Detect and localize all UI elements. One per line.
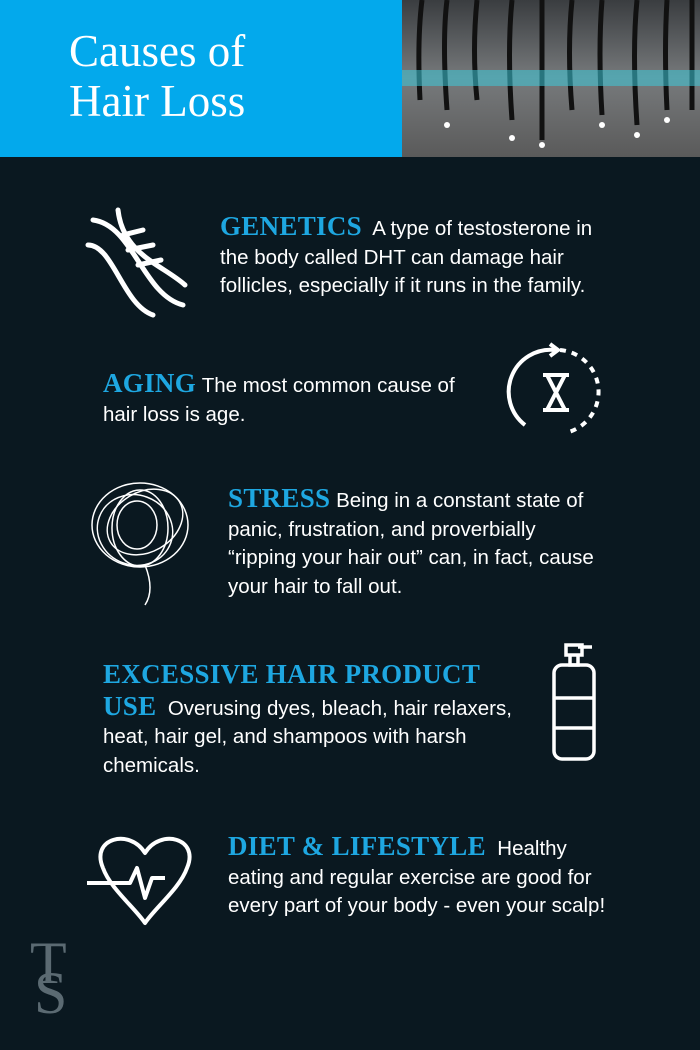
header panel — [0, 0, 402, 157]
text: genetics: GENETICS A type of testosterone in — [220, 211, 592, 241]
icon: hourglass — [506, 342, 601, 434]
text: excessive product use: EXCESSIVE HAIR PRODUCT — [103, 659, 480, 689]
text: diet & lifestyle: DIET & LIFESTYLE Healthy — [228, 831, 567, 861]
title — [69, 26, 246, 126]
icon: tangled scribble — [91, 482, 189, 606]
text: diet & lifestyle: eating and regular exercise are good for — [228, 866, 592, 888]
text: stress: your hair to fall out. — [228, 574, 402, 598]
text: excessive product use — [103, 659, 512, 776]
logo: TS — [30, 930, 67, 1026]
text: aging: hair loss is age. — [103, 402, 245, 426]
logo: TS: T — [30, 930, 67, 996]
icon: DNA — [86, 208, 188, 318]
icon: heart with pulse — [87, 836, 192, 926]
text: stress — [228, 483, 594, 598]
text: genetics: the body called DHT can damage hair — [220, 246, 564, 268]
header image: hair follicles — [402, 0, 700, 157]
text: excessive product use: USE Overusing dyes, bleach, hair relaxers, — [103, 690, 512, 720]
title: Causes of — [69, 26, 245, 76]
text: stress: “ripping your hair out” can, in fact, cause — [228, 546, 594, 569]
text: genetics — [220, 211, 592, 297]
icon: bottle — [552, 643, 596, 761]
text: diet & lifestyle — [228, 831, 605, 917]
text: excessive product use: chemicals. — [103, 754, 200, 776]
text: stress: panic, frustration, and proverbially — [228, 518, 536, 540]
text: diet & lifestyle: every part of your body - even your scalp! — [228, 894, 605, 917]
text: stress: STRESS Being in a constant state of — [228, 483, 583, 513]
title: Hair Loss — [69, 76, 245, 126]
text: aging — [103, 368, 455, 426]
text: excessive product use: heat, hair gel, and shampoos with harsh — [103, 725, 467, 748]
text: genetics: follicles, especially if it runs in the family. — [220, 274, 585, 297]
logo: TS: S — [34, 960, 67, 1026]
text: aging: AGING The most common cause of — [103, 368, 455, 398]
